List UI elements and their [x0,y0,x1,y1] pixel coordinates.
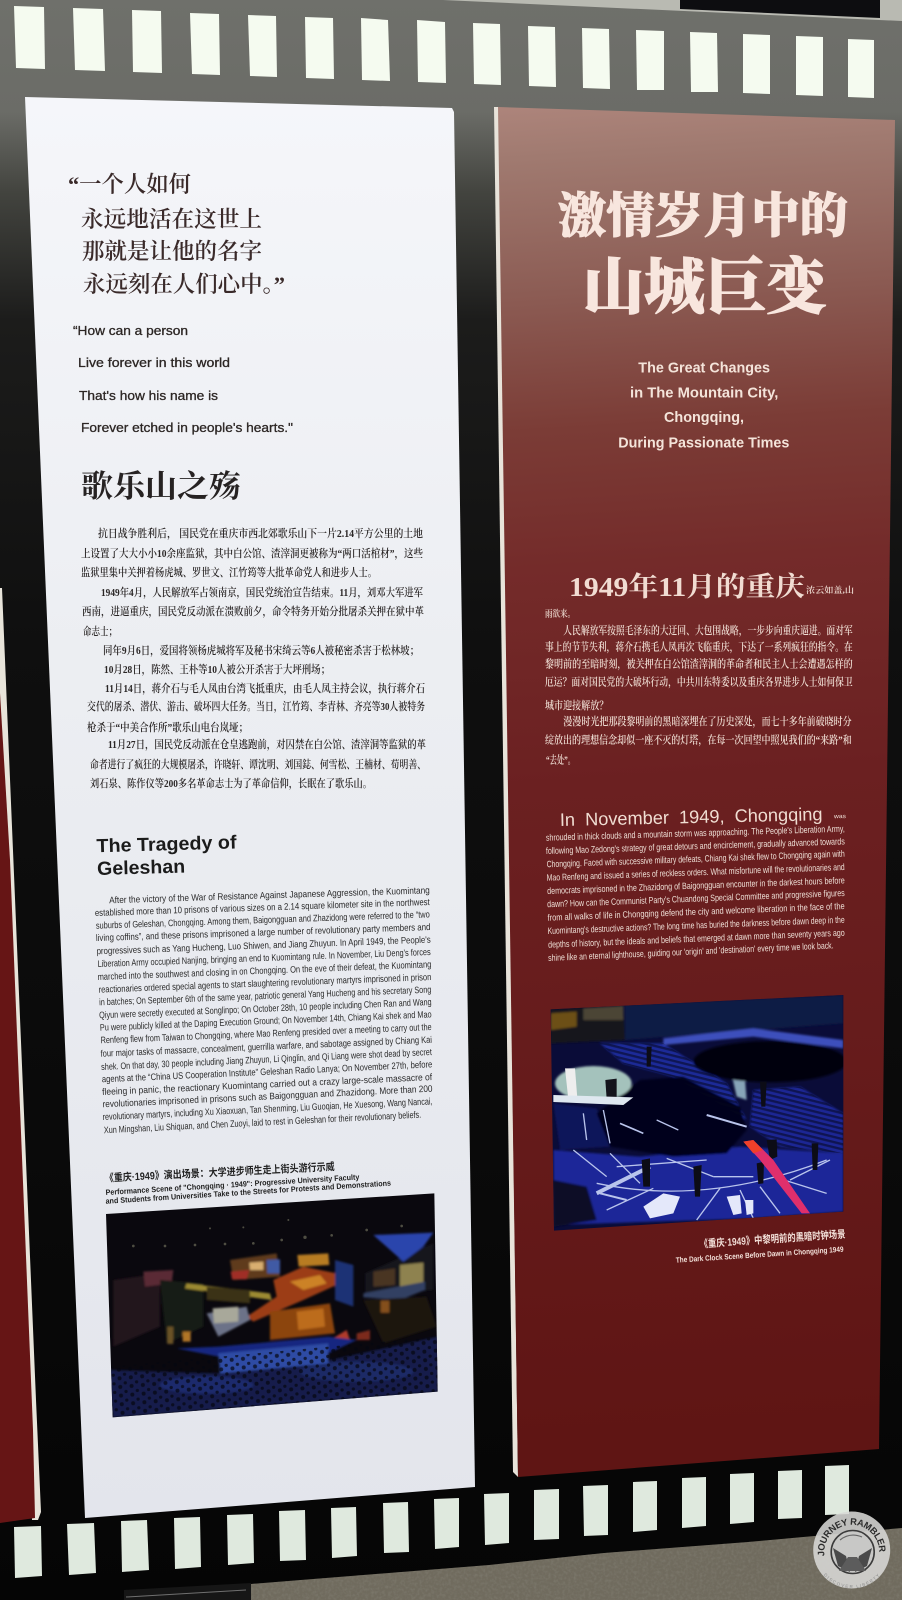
Chinese body text: 监狱里集中关押着杨虎城、罗世文、江竹筠等大批革命党人和进步人士。 [81,565,377,579]
Chinese body text: 西南，进逼重庆，国民党反动派在溃败前夕，命令特务开始分批屠杀关押在狱中革 [82,604,424,618]
Chinese body text: 同年9月6日，爱国将领杨虎城将军及秘书宋绮云等6人被秘密杀害于松林坡； [103,643,419,657]
Chinese body text: 刘石泉、陈作仪等200多名革命志士为了革命信仰，长眠在了歌乐山。 [90,776,372,790]
English body text: shek. On that day, 30 people including Jiang Zhuyun, Li Qinglin, and Qi Liang were shot dead by secret [101,1046,432,1072]
English body text: revolutionaries imprisoned in prisons such as Baigongguan and Zhazidong. More than 200 [102,1083,433,1109]
English subtitle: During Passionate Times [618,434,789,451]
photo caption: performance scene: Performance Scene of "Chongqing · 1949": Progressive University Faculty [105,1172,360,1197]
English body text: fleeing in panic, the reactionary Kuomintang carried out a crazy large-scale massacre of [102,1071,433,1097]
Chinese body text [81,526,426,790]
English heading [96,832,237,880]
main title in Chinese [558,190,848,322]
photo caption: clock scene [676,1228,846,1265]
Chinese body text: 交代的屠杀、潜伏、游击、破坏四大任务。当日，江竹筠、李青林、齐亮等30人被特务 [87,699,425,713]
Chinese body text: 10月28日，陈然、王朴等10人被公开杀害于大坪刑场； [104,662,330,676]
English body text: progressives such as Yang Hucheng, Luo Shiwen, and Jiang Zhuyun. In April 1949, the People's [96,934,431,956]
background wall top right [443,0,902,21]
English body text: Qiyun were secretly executed at Songlinpo; On October 28th, 10 people including Chen Ran and Wang [99,996,432,1020]
Chinese body text: 枪杀于“中美合作所”歌乐山电台岚垭； [87,720,248,734]
English body text: After the victory of the War of Resistance Against Japanese Aggression, the Kuomintang [109,884,430,905]
white panel board [25,97,475,1518]
English body text: in batches; On September 6th of the same year, patriotic general Yang Hucheng and his secretary Song [99,984,431,1007]
Chinese body text: 11月27日，国民党反动派在仓皇逃跑前，对囚禁在白公馆、渣滓洞等监狱的革 [108,737,426,751]
small floor sign [124,1583,251,1600]
Chinese body text: 命者进行了疯狂的大规模屠杀，许晓轩、谭沈明、刘国鋕、何雪松、王楠材、荀明善、 [90,757,426,771]
Chinese section body: 浓云如盖,山 [806,585,854,595]
neighbouring red panel at left edge [0,588,41,1523]
English quote: That's how his name is [79,388,219,403]
English section body: was [833,814,846,820]
Chinese quote: 永远地活在这世上 [81,207,262,232]
photo caption: performance scene: and Students from Universities Take to the Streets for Protests and Demonstrations [105,1179,392,1206]
Chinese quote: “一个人如何 [68,172,191,197]
English body text: suburbs of Geleshan, Chongqing. Among them, Baigongguan and Zhazidong were referred to the “two [96,908,430,931]
English body text: living coffins”, and these prisons imprisoned a large number of revolutionary party members and [96,921,431,943]
white board edge [494,107,518,1477]
English quote [73,323,293,435]
Chinese body text: 1949年4月，人民解放军占领南京，国民党统治宣告结束。11月，刘邓大军进军 [101,585,423,599]
watermark badge: Journey Rambler: JOURNEY RAMBLER [818,1518,886,1556]
main title in Chinese: 山城巨变 [583,253,830,322]
English body text: Xun Mingshan, Liu Shiquan, and Chen Zuoyi, laid to rest in Geleshan for their revolutionary beliefs. [104,1109,421,1135]
Chinese body text: 命志士； [83,624,117,638]
English heading: Geleshan [97,857,185,880]
English subtitle: Chongqing, [664,409,744,426]
panel: white memorial text panel [25,97,475,1518]
English body text: established more than 10 prisons of various sizes on a 2.14 square kilometer site in the northwest [95,896,430,918]
main title in Chinese: 激情岁月中的 [558,190,848,243]
Chinese body text: 上设置了大大小小10余座监狱，其中白公馆、渣滓洞更被称为“两口活棺材”，这些 [81,546,423,560]
photo caption: performance scene [104,1160,392,1206]
Chinese section body: “去处”。 [546,752,575,766]
Chinese section heading: 1949年11月的重庆 [569,572,805,602]
English subtitle: The Great Changes [638,359,770,376]
Chinese body text: 11月14日，蒋介石与毛人凤由台湾飞抵重庆，由毛人凤主持会议，执行蒋介石 [105,681,425,695]
English quote: Live forever in this world [78,355,230,370]
English body text: Renfeng flew from Taiwan to Chongqing, where Mao Renfeng presided over a meeting to carry out the [100,1021,432,1045]
ground pavement [251,1528,902,1600]
photo caption: clock scene: The Dark Clock Scene Before Dawn in Chongqing 1949 [676,1245,844,1265]
Chinese heading: 歌乐山之殇 [81,469,241,504]
English body text [95,884,433,1135]
film sprocket holes: top row [14,6,874,98]
English section heading: In November 1949, Chongqing [560,804,823,830]
Chinese quote: 永远刻在人们心中。” [83,272,285,297]
English subtitle [618,359,789,451]
panel: red title panel [494,107,895,1477]
English subtitle: in The Mountain City, [630,384,778,401]
photo caption: clock scene: 《重庆·1949》中黎明前的黑暗时钟场景 [699,1228,846,1251]
watermark badge: Journey Rambler [813,1512,890,1588]
Chinese body text: 抗日战争胜利后， 国民党在重庆市西北郊歌乐山下一片2.14平方公里的土地 [98,526,423,540]
English body text: reactionaries ordered special agents to start slaughtering revolutionary martyrs imprisoned in prison [98,971,432,995]
English section body [546,814,846,963]
English quote: Forever etched in people's hearts." [81,420,293,435]
red panel board [498,107,895,1477]
film sprocket holes: bottom row [14,1465,849,1578]
photo caption: performance scene: 《重庆·1949》演出场景：大学进步师生走上街头游行示威 [104,1160,335,1185]
English body text: Liberation Army occupied Nanjing, bringing an end to Kuomintang rule. In November, Liu Deng's forces [97,946,431,969]
English body text: four major tasks of massacre, concealment, guerrilla warfare, and sabotage assigned by Chiang Kai [100,1034,432,1059]
watermark badge: Journey Rambler: DISCOVER LIBERTY [824,1573,879,1588]
photo: night stage performance [106,1193,438,1417]
English body text: revolutionary martyrs, including Xu Xiaoxuan, Tan Shenming, Liu Guoqian, He Xuesong, Wang Nancai, [102,1095,433,1122]
Chinese section body [545,585,854,766]
photo: dark clock stage scene [551,995,847,1231]
English body text: Pu were publicly killed at the Daping Execution Ground; On November 14th, Chiang Kai shek and Mao [100,1008,432,1033]
Chinese quote: 那就是让他的名字 [82,239,262,264]
Chinese quote [68,172,285,297]
English body text: marched into the southwest and closing in on Chongqing. On the eve of their defeat, the Kuomintang [97,958,432,982]
Chinese section body: 雨欲来。 [545,608,575,620]
Chinese section body: 城市迎接解放？ [545,698,608,712]
English heading: The Tragedy of [96,832,237,857]
English quote: “How can a person [73,323,188,338]
English body text: agents at the “China US Cooperation Institute” Geleshan Radio Lanya; On November 27th, before [102,1058,432,1084]
